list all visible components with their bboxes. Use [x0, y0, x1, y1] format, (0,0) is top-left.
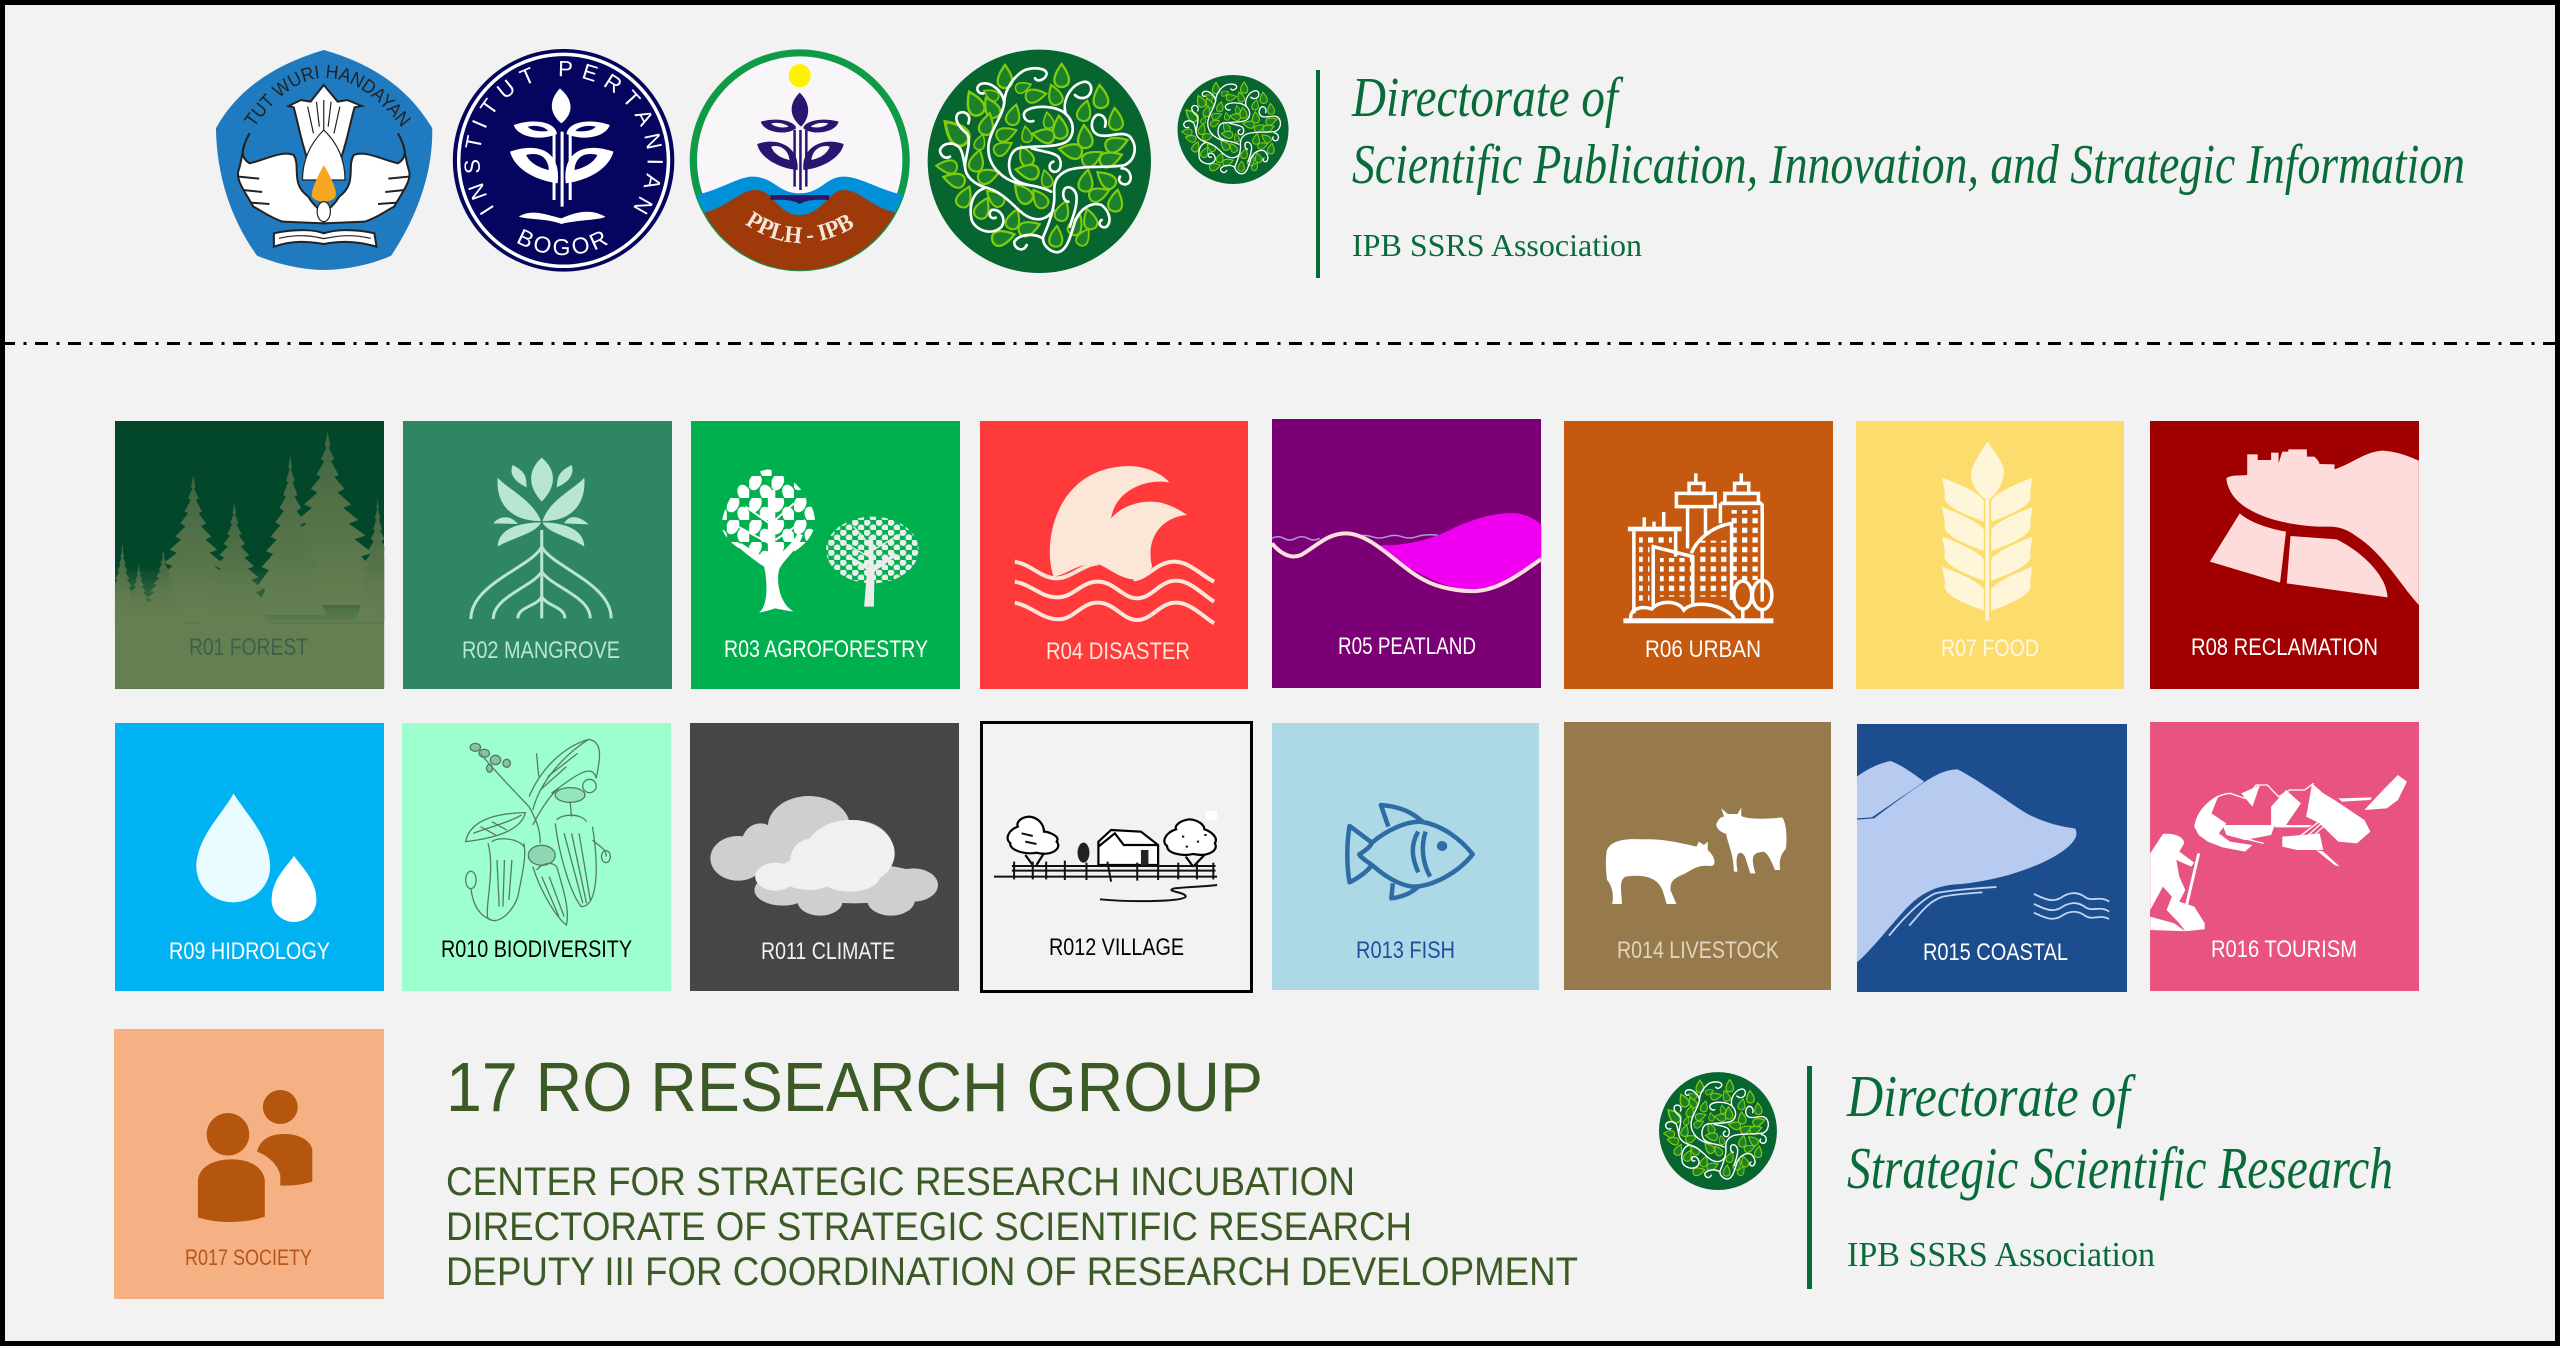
icon: clouds [710, 796, 938, 916]
dash-dot separator [2, 342, 2558, 345]
label: R017 SOCIETY: R017 SOCIETY [185, 1245, 312, 1270]
header text block: IPB SSRS Association [1352, 227, 1642, 263]
label: R08 RECLAMATION: R08 RECLAMATION [2191, 634, 2378, 661]
icon: city [1623, 473, 1773, 623]
logo: Tut Wuri Handayani [216, 50, 432, 270]
footer text block: Strategic Scientific Research [1847, 1135, 2393, 1201]
header text block [1351, 67, 2465, 263]
icon: tsunami wave [1015, 466, 1214, 623]
label: R05 PEATLAND: R05 PEATLAND [1338, 633, 1476, 660]
label: R04 DISASTER: R04 DISASTER [1046, 638, 1190, 665]
panel: R07 Food [1856, 421, 2124, 689]
icon: forest trees [106, 432, 400, 689]
footer text block [1846, 1063, 2393, 1274]
label: R09 HIDROLOGY: R09 HIDROLOGY [169, 938, 330, 965]
logo: large SSRS leaf emblem [928, 50, 1151, 273]
icon: fish [1347, 805, 1473, 898]
icon: coast and mountains [1857, 761, 2109, 962]
panel: R013 Fish [1272, 723, 1539, 990]
label: R07 FOOD: R07 FOOD [1941, 635, 2039, 662]
logo: small SSRS leaf emblem [1178, 75, 1289, 184]
panel: R01 Forest [106, 421, 400, 689]
logo: Institut Pertanian Bogor: INSTITUT PERTANIAN [464, 61, 663, 216]
label: R03 AGROFORESTRY: R03 AGROFORESTRY [724, 636, 928, 663]
footer divider bar [1807, 1066, 1812, 1289]
panel: R05 Peatland [1272, 419, 1541, 688]
label: R06 URBAN: R06 URBAN [1645, 636, 1761, 663]
logo: Institut Pertanian Bogor: BOGOR [517, 228, 608, 256]
logo: PPLH IPB: PPLH - IPB [745, 210, 854, 244]
panel: R010 Biodiversity [402, 723, 671, 991]
icon: peat cross-section [1272, 513, 1541, 591]
icon: pitcher plant sketch [466, 739, 610, 925]
icon: people [198, 1090, 312, 1222]
panel: R09 Hidrology [115, 723, 384, 991]
panel: R02 Mangrove [403, 421, 672, 689]
label: R01 FOREST: R01 FOREST [189, 634, 308, 661]
heading: 17 RO RESEARCH GROUP: 17 RO RESEARCH GROUP [446, 1048, 1263, 1126]
panel: R012 Village [982, 722, 1252, 992]
icon: hiker and mountain [2150, 775, 2407, 931]
label: R013 FISH: R013 FISH [1356, 937, 1455, 964]
label: R016 TOURISM: R016 TOURISM [2211, 936, 2357, 963]
icon: water drops [196, 793, 316, 922]
icon: two trees [722, 469, 919, 613]
panel: R014 Livestock [1564, 722, 1831, 990]
text block: organisation lines: CENTER FOR STRATEGIC RESEARCH INCUBATION [446, 1160, 1355, 1204]
icon: wheat [1942, 442, 2032, 621]
label: R010 BIODIVERSITY: R010 BIODIVERSITY [441, 936, 632, 963]
panel: R08 Reclamation [2150, 421, 2419, 689]
icon: cows [1606, 808, 1786, 904]
panel: R011 Climate [690, 723, 959, 991]
label: R011 CLIMATE: R011 CLIMATE [761, 938, 895, 965]
icon: village scene [994, 811, 1217, 901]
panel: R04 Disaster [980, 421, 1248, 689]
header text block: Directorate of [1351, 67, 1624, 129]
icon: reclaimed land [2210, 449, 2419, 605]
panel: R016 Tourism [2150, 722, 2419, 991]
text block: organisation lines: DEPUTY III FOR COORDINATION OF RESEARCH DEVELOPMENT [446, 1250, 1578, 1294]
logo: footer SSRS leaf emblem [1659, 1072, 1777, 1190]
panel: R015 Coastal [1857, 724, 2127, 992]
panel: R03 Agroforestry [691, 421, 960, 689]
header divider bar [1316, 70, 1320, 278]
panel: R06 Urban [1564, 421, 1833, 689]
panel: R017 Society [114, 1029, 384, 1299]
footer text block: IPB SSRS Association [1847, 1235, 2155, 1274]
label: R015 COASTAL: R015 COASTAL [1923, 939, 2068, 966]
logo: PPLH IPB [690, 49, 910, 272]
icon: mangrove [471, 458, 611, 619]
text block: organisation lines [446, 1160, 1578, 1294]
label: R014 LIVESTOCK: R014 LIVESTOCK [1617, 937, 1779, 964]
label: R012 VILLAGE: R012 VILLAGE [1049, 934, 1184, 961]
logo: Institut Pertanian Bogor [452, 49, 674, 272]
label: R02 MANGROVE: R02 MANGROVE [462, 637, 620, 664]
text block: organisation lines: DIRECTORATE OF STRATEGIC SCIENTIFIC RESEARCH [446, 1205, 1412, 1249]
footer text block: Directorate of [1846, 1063, 2136, 1129]
